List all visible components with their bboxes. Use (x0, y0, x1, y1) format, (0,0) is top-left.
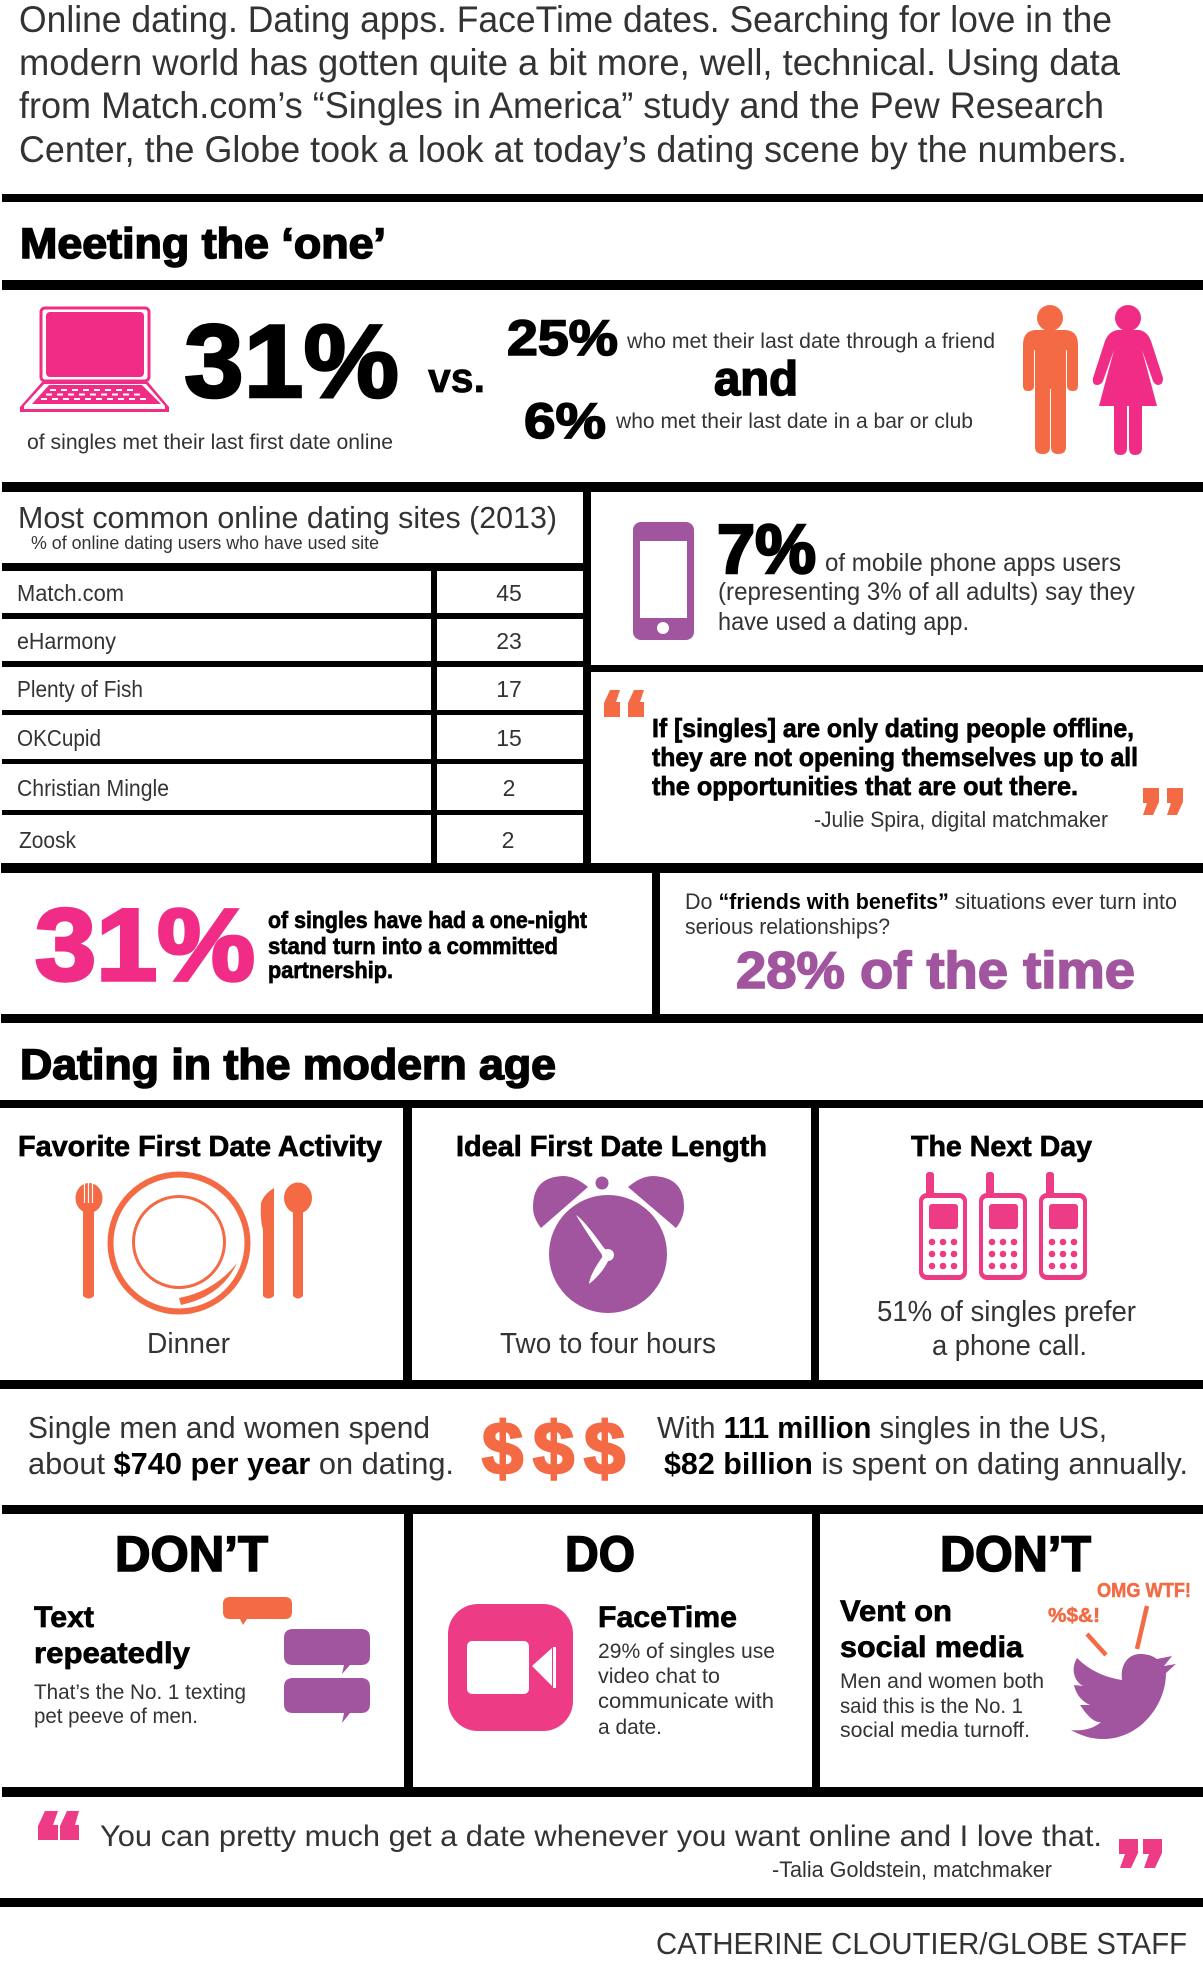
panel: dating sites table: Plenty of Fish (17, 676, 143, 702)
text: annual spending (657, 1410, 1188, 1481)
panel: do facetime: FaceTime (598, 1601, 737, 1634)
icon: woman (1093, 305, 1163, 455)
stat: 7% mobile apps: have used a dating app. (718, 608, 969, 636)
panel: don't text repeatedly: repeatedly (34, 1637, 190, 1670)
stat: 7% mobile apps: 7% (717, 510, 816, 588)
panel: ideal first date length: Ideal First Date Length (456, 1131, 767, 1163)
stat: 25% and 6%: 25% (507, 310, 618, 366)
stat: 25% and 6%: 6% (524, 393, 606, 449)
panel: ideal first date length: Two to four hours (500, 1328, 716, 1360)
text: spending per year: about $740 per year on dating. (28, 1446, 454, 1481)
panel: don't vent on social media (840, 1526, 1191, 1742)
stat: 31% one-night stand: partnership. (268, 957, 393, 983)
panel: do facetime (448, 1526, 775, 1739)
quote: Talia Goldstein (100, 1820, 1102, 1882)
vs label: vs. (428, 354, 485, 401)
panel: don't vent on social media: Men and women both (840, 1669, 1044, 1693)
text: spending per year: Single men and women spend (28, 1410, 430, 1445)
stat: 31% online (27, 304, 399, 454)
stat: friends with benefits (685, 889, 1177, 1000)
quote: Talia Goldstein: You can pretty much get a date whenever you want online and I love that. (100, 1820, 1102, 1853)
panel: don't text repeatedly: pet peeve of men. (34, 1704, 198, 1728)
panel: don't text repeatedly: DON’T (115, 1526, 268, 1582)
icon: dollar signs: $$$ (482, 1407, 625, 1490)
panel: dating sites table: Christian Mingle (17, 775, 169, 801)
panel: favorite first date activity (18, 1131, 382, 1360)
panel: the next day: The Next Day (911, 1131, 1092, 1163)
panel: dating sites table: 15 (496, 725, 522, 751)
panel: dating sites table: 2 (502, 827, 514, 853)
stat: 7% mobile apps (717, 510, 1135, 636)
icon: pink closing quote mark (1119, 1839, 1162, 1868)
stat: 31% online: 31% (184, 304, 399, 420)
panel: the next day: 51% of singles prefer (877, 1296, 1136, 1328)
panel: don't vent on social media: Vent on (840, 1595, 952, 1628)
credit line: CATHERINE CLOUTIER/GLOBE STAFF (656, 1926, 1187, 1961)
panel: dating sites table: eHarmony (17, 628, 116, 654)
panel: dating sites table: 17 (496, 676, 522, 702)
text: annual spending: With 111 million singles in the US, (657, 1410, 1107, 1445)
text: spending per year (28, 1410, 454, 1481)
panel: dating sites table: 23 (496, 628, 522, 654)
quote: Talia Goldstein: -Talia Goldstein, matchmaker (772, 1857, 1052, 1882)
icon: twitter bird shouting: %$&! (1048, 1605, 1100, 1627)
icon: twitter bird shouting: OMG WTF! (1097, 1580, 1191, 1602)
stat: 7% mobile apps: of mobile phone apps users (825, 549, 1121, 577)
stat: friends with benefits: Do “friends with benefits” situations ever turn into (685, 889, 1177, 914)
stat: 25% and 6% (507, 310, 995, 449)
intro text block: from Match.com’s “Singles in America” study and the Pew Research (19, 85, 1104, 126)
panel: dating sites table: Zoosk (19, 827, 76, 853)
panel: do facetime: communicate with (598, 1689, 774, 1713)
panel: the next day: a phone call. (932, 1330, 1087, 1362)
icon: man (1023, 305, 1078, 454)
panel: do facetime: video chat to (598, 1664, 720, 1688)
intro text block (19, 0, 1127, 170)
intro text block: Center, the Globe took a look at today’s dating scene by the numbers. (19, 129, 1127, 170)
quote: Julie Spira: the opportunities that are out there. (652, 771, 1078, 801)
panel: don't text repeatedly: Text (34, 1601, 94, 1634)
panel: dating sites table: OKCupid (17, 725, 101, 751)
icon: opening quote mark (604, 690, 644, 717)
stat: friends with benefits: serious relationships? (685, 914, 890, 939)
panel: favorite first date activity: Favorite First Date Activity (18, 1131, 382, 1163)
stat: 25% and 6%: and (714, 353, 798, 406)
icon: mobile phone (633, 522, 694, 640)
stat: friends with benefits: 28% of the time (736, 942, 1135, 1000)
panel: do facetime: DO (565, 1526, 635, 1582)
stat: 31% online: of singles met their last first date online (27, 430, 393, 454)
stat: 25% and 6%: who met their last date in a bar or club (615, 409, 973, 433)
panel: don't text repeatedly (34, 1526, 370, 1728)
panel: dating sites table: 45 (496, 580, 522, 606)
panel: don't vent on social media: DON’T (940, 1526, 1091, 1582)
icon: closing quote mark (1143, 788, 1183, 815)
panel: dating sites table (17, 500, 557, 853)
stat: 31% one-night stand: 31% (35, 888, 255, 1002)
stat: 7% mobile apps: (representing 3% of all adults) say they (718, 578, 1135, 606)
panel: dating sites table: Most common online dating sites (2013) (18, 500, 557, 535)
stat: 25% and 6%: who met their last date through a friend (626, 329, 995, 353)
stat: 31% one-night stand: stand turn into a committed (268, 933, 558, 959)
panel: dating sites table: % of online dating users who have used site (31, 533, 379, 553)
panel: don't text repeatedly: That’s the No. 1 texting (34, 1680, 246, 1704)
heading: Meeting the one: Meeting the ‘one’ (20, 220, 386, 268)
icon: alarm clock (533, 1176, 684, 1313)
panel: don't vent on social media: social media (840, 1631, 1023, 1664)
quote: Julie Spira: they are not opening themselves up to all (652, 742, 1138, 772)
intro text block: modern world has gotten quite a bit more, well, technical. Using data (19, 42, 1120, 83)
panel: don't vent on social media: social media turnoff. (840, 1718, 1030, 1742)
icon: plate and cutlery (76, 1174, 312, 1312)
icon: video camera (448, 1604, 573, 1731)
icon: twitter bird shouting (1048, 1580, 1191, 1739)
stat: 31% one-night stand: of singles have had a one-night (268, 907, 587, 933)
quote: Julie Spira: -Julie Spira, digital matchmaker (814, 807, 1108, 832)
icon: laptop (20, 308, 169, 412)
panel: do facetime: 29% of singles use (598, 1639, 775, 1663)
quote: Julie Spira: If [singles] are only dating people offline, (652, 713, 1134, 743)
panel: dating sites table: 2 (503, 775, 515, 801)
panel: do facetime: a date. (598, 1715, 662, 1739)
intro text block: Online dating. Dating apps. FaceTime dates. Searching for love in the (19, 0, 1112, 40)
quote: Julie Spira (652, 713, 1138, 832)
panel: dating sites table: Match.com (17, 580, 124, 606)
icon: three phones (919, 1172, 1087, 1280)
stat: 31% one-night stand (35, 888, 587, 1002)
panel: ideal first date length (456, 1131, 767, 1360)
icon: pink opening quote mark (38, 1811, 79, 1840)
panel: favorite first date activity: Dinner (147, 1328, 230, 1360)
panel: the next day (877, 1131, 1136, 1362)
panel: don't vent on social media: said this is the No. 1 (840, 1694, 1023, 1718)
icon: speech bubbles (223, 1597, 370, 1723)
heading: Dating in the modern age: Dating in the modern age (20, 1041, 556, 1089)
text: annual spending: $82 billion is spent on dating annually. (664, 1446, 1188, 1481)
